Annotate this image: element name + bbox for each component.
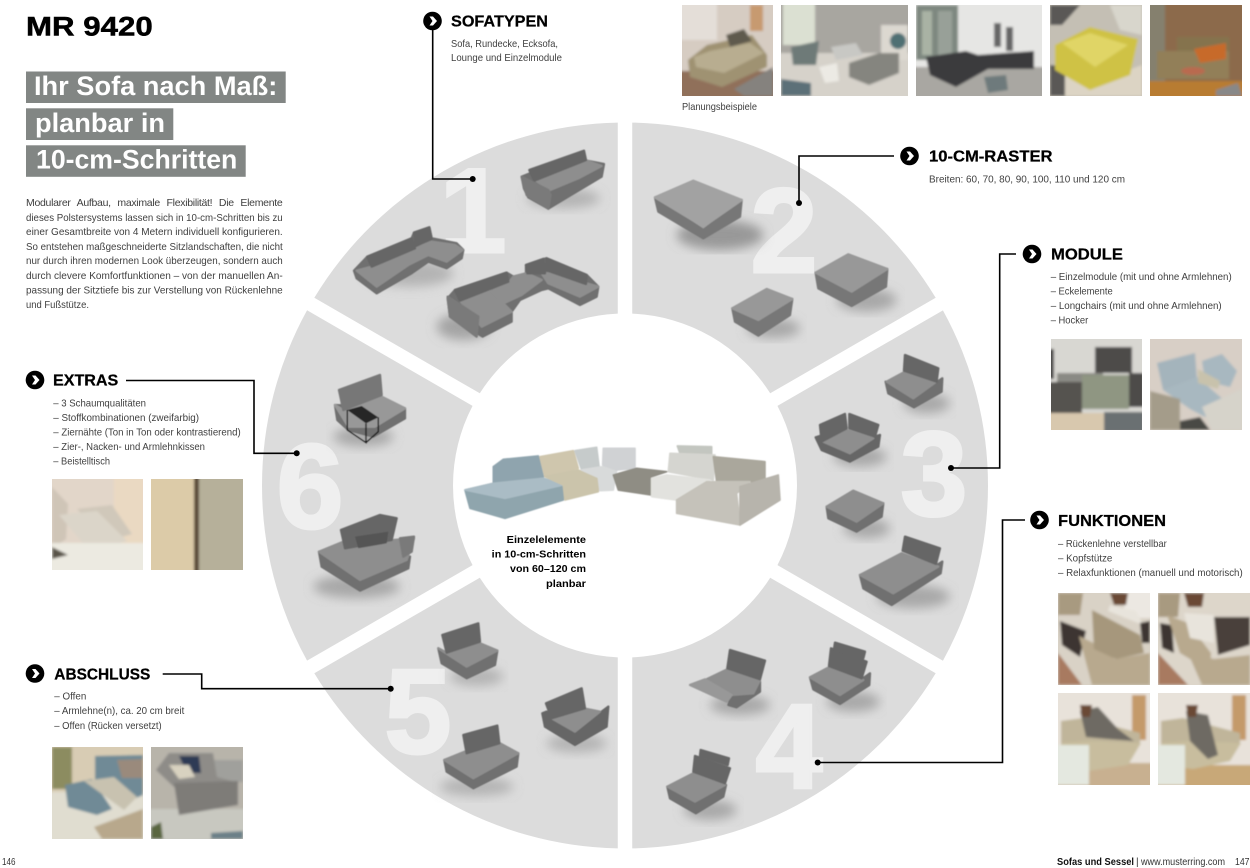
panel: segment 2 raster: 2	[751, 164, 817, 298]
section: sofatypen: SOFATYPEN	[451, 14, 548, 30]
section: extras: – Stoffkombinationen (zweifarbig)	[53, 412, 199, 424]
photo: module dark sofa	[1051, 339, 1142, 430]
ottoman: medium	[816, 254, 897, 312]
photo: planning example beige sofa	[682, 5, 773, 96]
photo: function backrest reclined	[1158, 593, 1250, 685]
intro text block: nur durch ihren modernen Look überzeugen, sondern auch	[26, 255, 283, 267]
section: module: – Einzelmodule (mit und ohne Armlehnen)	[1051, 271, 1232, 283]
icon: extras connector	[126, 380, 300, 456]
section: sofatypen	[423, 12, 562, 64]
intro text block: passung der Sitztiefe bis zur Verstellung von Rückenlehne	[26, 284, 283, 296]
photo: extras stitching	[151, 479, 243, 570]
intro text block	[26, 197, 283, 311]
extra: side table seat	[333, 375, 405, 447]
intro text block: dieses Polstersystems lassen sich in 10-cm-Schritten bis zu	[26, 212, 283, 224]
end: armrest	[542, 688, 608, 753]
icon: funktionen connector	[815, 520, 1025, 766]
module: single seat	[886, 355, 950, 413]
headline banners: 10-cm-Schritten	[36, 144, 237, 174]
center caption: von 60–120 cm	[510, 563, 586, 575]
section: raster: 10-CM-RASTER	[929, 149, 1052, 166]
photo: extras cushions	[52, 479, 143, 570]
section: funktionen: – Kopfstütze	[1058, 552, 1112, 564]
module: corner element	[816, 414, 887, 467]
panel: segment 6 extras	[262, 310, 473, 661]
panel: segment 4 funktionen	[632, 578, 936, 848]
footer right: www.musterring.com	[1140, 857, 1225, 868]
section: module: MODULE	[1051, 246, 1123, 264]
icon: arrow	[1030, 511, 1049, 529]
panel: segment 1 sofatypen	[314, 123, 618, 393]
icon: arrow	[423, 12, 442, 30]
page number left: 146	[2, 857, 16, 868]
photo: module light blue seat	[1150, 339, 1242, 430]
photo: planning example olive sofa	[1150, 5, 1242, 96]
function: recliner	[690, 650, 770, 715]
icon: arrow	[1023, 245, 1041, 263]
headline banners: planbar in	[35, 108, 165, 138]
section: abschluss	[26, 664, 184, 732]
panel: segment 2 raster	[632, 123, 936, 393]
photo: abschluss grey sofa	[151, 747, 243, 839]
module: longchair	[860, 537, 950, 608]
headline banners	[26, 71, 286, 177]
section: raster: Breiten: 60, 70, 80, 90, 100, 110 und 120 cm	[929, 174, 1125, 186]
intro text block: einer Gesamtbreite von 4 Metern individuell konfigurieren.	[26, 226, 283, 238]
section: sofatypen: Sofa, Rundecke, Ecksofa,	[451, 38, 558, 50]
sofa: two-seater	[522, 151, 604, 209]
photo: function relax one	[1058, 693, 1150, 785]
end: offset back	[440, 726, 518, 796]
section: extras: – Zier-, Nacken- und Armlehnkissen	[53, 441, 205, 453]
function: seat with headrest	[667, 750, 737, 820]
section: extras	[26, 371, 241, 468]
center caption	[492, 534, 586, 590]
center sofa	[465, 446, 780, 525]
sofa: corner sofa	[354, 227, 463, 293]
section: sofatypen: Lounge und Einzelmodule	[451, 52, 562, 64]
center caption: planbar	[546, 578, 586, 590]
center caption: in 10-cm-Schritten	[492, 548, 586, 560]
photo: planning example yellow sofa	[1050, 5, 1142, 96]
section: module: – Hocker	[1051, 314, 1089, 326]
icon: module connector	[948, 254, 1016, 471]
section: raster	[900, 147, 1125, 186]
icon: abschluss connector	[163, 674, 394, 692]
icon: sofatypen connector	[433, 30, 476, 182]
module: stool	[827, 491, 890, 538]
end: open	[438, 623, 503, 686]
section: abschluss: – Offen	[54, 690, 86, 702]
section: module	[1023, 245, 1232, 326]
section: abschluss: – Offen (Rücken versetzt)	[54, 720, 162, 732]
section: abschluss: ABSCHLUSS	[54, 666, 150, 683]
section: extras: – Ziernähte (Ton in Ton oder kontrastierend)	[53, 426, 241, 438]
section: abschluss: – Armlehne(n), ca. 20 cm breit	[54, 705, 184, 717]
footer right: Sofas und Sessel	[1057, 857, 1134, 868]
ottoman: large	[655, 181, 763, 250]
footer right: |	[1136, 857, 1139, 868]
ottoman: small	[732, 289, 800, 338]
icon: arrow	[26, 371, 44, 389]
section: extras: – Beistelltisch	[53, 456, 110, 468]
section: extras: EXTRAS	[53, 373, 118, 390]
panel: segment 5 abschluss: 5	[385, 645, 451, 779]
photo: planning example dark sofa	[916, 5, 1042, 96]
icon: arrow	[900, 147, 919, 165]
panel: segment 4 funktionen: 4	[756, 680, 823, 814]
intro text block: durch clevere Komfortfunktionen – von der manuellen An-	[26, 270, 283, 282]
section: funktionen: – Rückenlehne verstellbar	[1058, 538, 1167, 550]
center caption: Einzelelemente	[507, 534, 586, 546]
section: extras: – 3 Schaumqualitäten	[53, 398, 146, 410]
title: MR 9420	[26, 12, 153, 42]
photo: planning example grey loft	[781, 5, 908, 96]
section: module: – Longchairs (mit und ohne Armlehnen)	[1051, 300, 1222, 312]
function: headrest seat	[810, 643, 880, 712]
caption: planungsbeispiele: Planungsbeispiele	[682, 101, 757, 113]
panel: segment 5 abschluss	[314, 578, 618, 848]
section: funktionen: FUNKTIONEN	[1058, 513, 1166, 530]
panel: segment 3 module	[777, 310, 988, 661]
extra: cushions sofa	[313, 515, 414, 598]
icon: arrow	[26, 664, 44, 683]
panel: segment 1 sofatypen: 1	[440, 144, 506, 278]
photo: function relax two	[1158, 693, 1250, 785]
panel: segment 6 extras: 6	[277, 420, 343, 554]
intro text block: Modularer Aufbau, maximale Flexibilität! Die Elemente	[26, 197, 283, 209]
photo: abschluss blue sofa	[52, 747, 143, 839]
intro text block: So entstehen maßgeschneiderte Sitzlandschaften, die nicht	[26, 241, 283, 253]
icon: raster connector	[796, 156, 894, 206]
headline banners: Ihr Sofa nach Maß:	[34, 71, 277, 101]
section: module: – Eckelemente	[1051, 286, 1113, 298]
intro text block: und Fußstütze.	[26, 299, 89, 311]
section: funktionen	[1030, 511, 1243, 579]
footer right	[1057, 857, 1250, 868]
panel: segment 3 module: 3	[901, 407, 967, 541]
photo: function backrest upright	[1058, 593, 1150, 685]
sofa: u-shaped sofa	[437, 258, 598, 340]
